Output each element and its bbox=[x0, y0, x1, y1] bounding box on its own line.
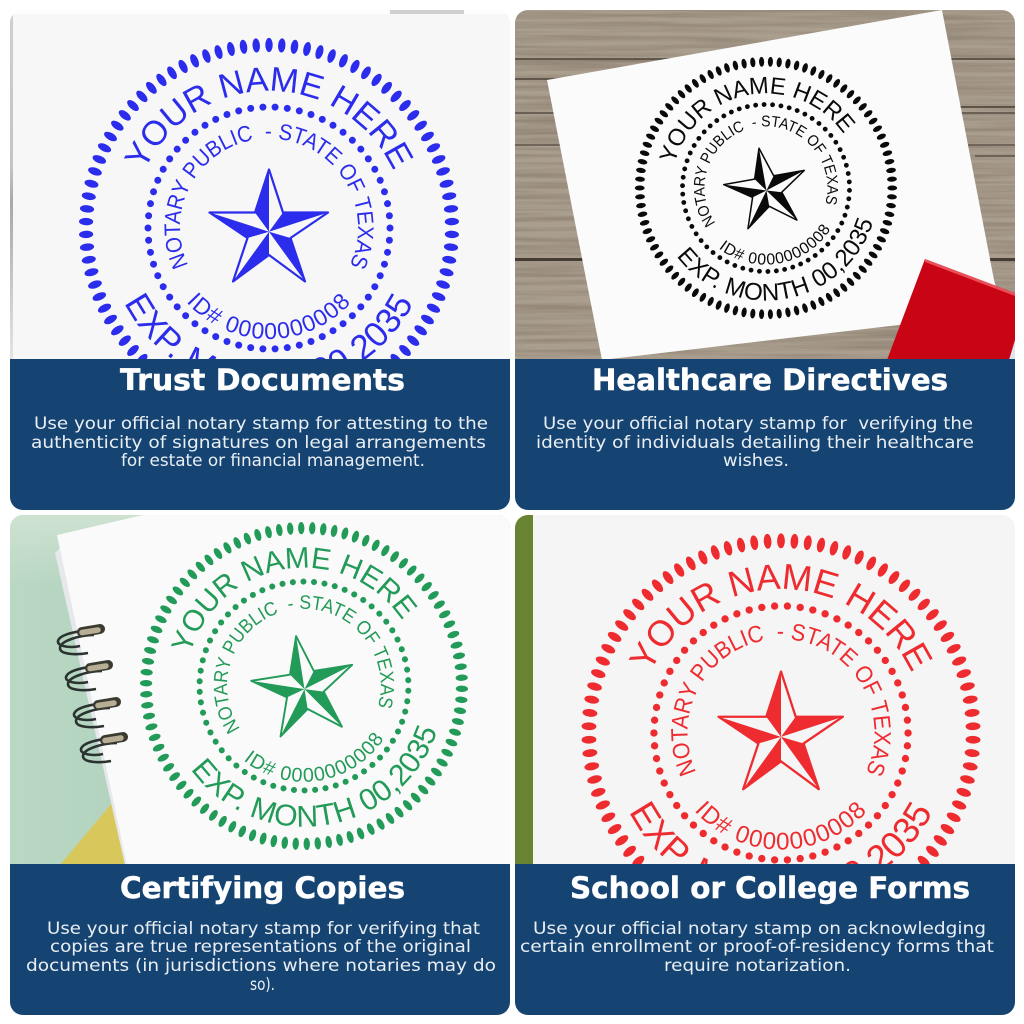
black notary stamp: YOUR NAME HERE bbox=[659, 76, 856, 158]
caption band bbox=[515, 359, 1015, 510]
white paper sheet bbox=[547, 10, 1000, 360]
description text: certain enrollment or proof-of-residency forms that bbox=[520, 937, 995, 956]
blue notary stamp bbox=[79, 38, 459, 359]
caption band bbox=[10, 864, 510, 1015]
heading: certifying copies: Certifying Copies bbox=[120, 871, 405, 905]
red box bbox=[887, 259, 1015, 360]
blue notary stamp: NOTARY PUBLIC - STATE OF TEXAS bbox=[164, 124, 374, 270]
red notary stamp: EXP. MONTH 00,2035 bbox=[630, 801, 930, 864]
description text bbox=[26, 919, 496, 994]
heading: school or college forms: School or College Forms bbox=[570, 871, 970, 905]
description text: identity of individuals detailing their healthcare bbox=[536, 433, 974, 452]
description text: Use your official notary stamp on acknowledging bbox=[533, 919, 986, 938]
green notary stamp bbox=[140, 522, 468, 850]
description text: so). bbox=[250, 975, 275, 994]
panel: certifying copies bbox=[10, 515, 510, 1015]
red notary stamp: NOTARY PUBLIC - STATE OF TEXAS bbox=[671, 624, 891, 776]
blue notary stamp: YOUR NAME HERE bbox=[124, 67, 414, 170]
panel: school or college forms bbox=[515, 515, 1015, 1015]
description text: documents (in jurisdictions where notaries may do bbox=[26, 956, 496, 975]
caption band bbox=[515, 864, 1015, 1015]
green notary stamp: EXP. MONTH 00,2035 bbox=[192, 725, 436, 827]
heading: healthcare directives: Healthcare Directives bbox=[592, 363, 948, 397]
red notary stamp: ID# 0000000008 bbox=[696, 800, 865, 850]
description text bbox=[538, 416, 973, 466]
description text: copies are true representations of the original bbox=[50, 937, 471, 956]
red notary stamp: YOUR NAME HERE bbox=[628, 564, 933, 672]
description text bbox=[31, 414, 488, 470]
panel: trust documents bbox=[10, 10, 510, 510]
black notary stamp: EXP. MONTH 00,2035 bbox=[678, 218, 872, 301]
description text: require notarization. bbox=[664, 956, 851, 975]
description text: Use your official notary stamp for verifying that bbox=[47, 919, 481, 938]
black notary stamp: ID# 0000000008 bbox=[720, 224, 830, 265]
red notary stamp bbox=[582, 533, 980, 864]
panel: healthcare directives bbox=[515, 10, 1015, 510]
black notary stamp: NOTARY PUBLIC - STATE OF TEXAS bbox=[694, 116, 838, 228]
photo: white paper background bbox=[10, 10, 510, 360]
green notary stamp: YOUR NAME HERE bbox=[170, 547, 418, 646]
description text: Use your official notary stamp for attesting to the bbox=[34, 414, 488, 433]
blue notary stamp: ID# 0000000008 bbox=[188, 292, 349, 340]
photo: wood table background bbox=[515, 10, 1015, 360]
description text: wishes. bbox=[723, 451, 789, 470]
green notary stamp: NOTARY PUBLIC - STATE OF TEXAS bbox=[214, 595, 394, 734]
photo: paper on olive surface bbox=[515, 515, 1015, 865]
description text bbox=[520, 919, 995, 975]
photo: green desk background bbox=[10, 515, 510, 865]
description text: for estate or financial management. bbox=[121, 451, 425, 470]
heading: trust documents: Trust Documents bbox=[120, 363, 405, 397]
description text: authenticity of signatures on legal arrangements bbox=[31, 433, 486, 452]
spiral binding rings bbox=[58, 629, 125, 762]
notebook paper bbox=[55, 515, 510, 865]
black notary stamp bbox=[634, 56, 898, 320]
green notary stamp: ID# 0000000008 bbox=[244, 732, 382, 782]
blue notary stamp: EXP. MONTH 00,2035 bbox=[125, 292, 411, 359]
description text: Use your official notary stamp for verifying the bbox=[543, 414, 973, 433]
caption band bbox=[10, 359, 510, 510]
